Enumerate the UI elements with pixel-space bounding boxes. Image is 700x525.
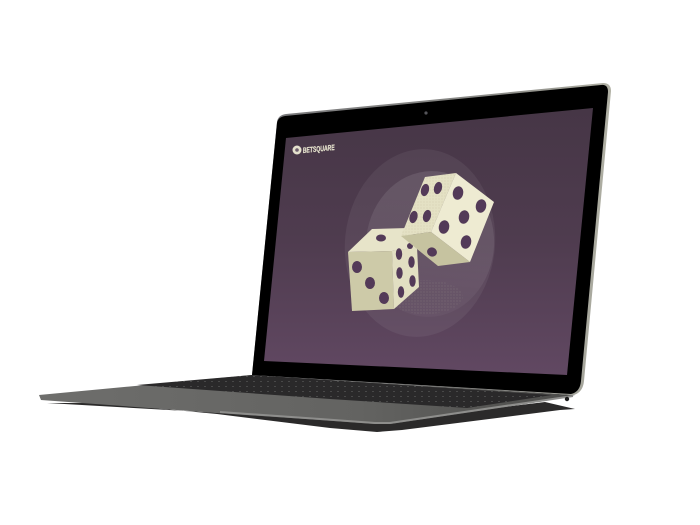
base shadow: [47, 402, 575, 432]
logo icon: [292, 146, 302, 154]
upper die pips: [408, 181, 488, 258]
camera: [424, 111, 428, 115]
lid black bezel: [252, 85, 608, 394]
laptop base: [39, 375, 575, 424]
dice: [348, 173, 494, 311]
lower die: [348, 228, 419, 311]
keyboard: [137, 375, 552, 408]
upper die: [401, 173, 494, 266]
logo: [292, 143, 336, 155]
front edge highlight: [220, 396, 573, 423]
stipple: [387, 280, 463, 314]
laptop lid: [252, 83, 611, 395]
background circles: [336, 142, 504, 344]
port: [565, 397, 569, 401]
lid rim: [252, 83, 611, 395]
screen: [264, 108, 593, 375]
lower die pips: [352, 234, 416, 304]
logo text: BETSQUARE: [302, 143, 336, 155]
base top surface: [39, 375, 575, 424]
